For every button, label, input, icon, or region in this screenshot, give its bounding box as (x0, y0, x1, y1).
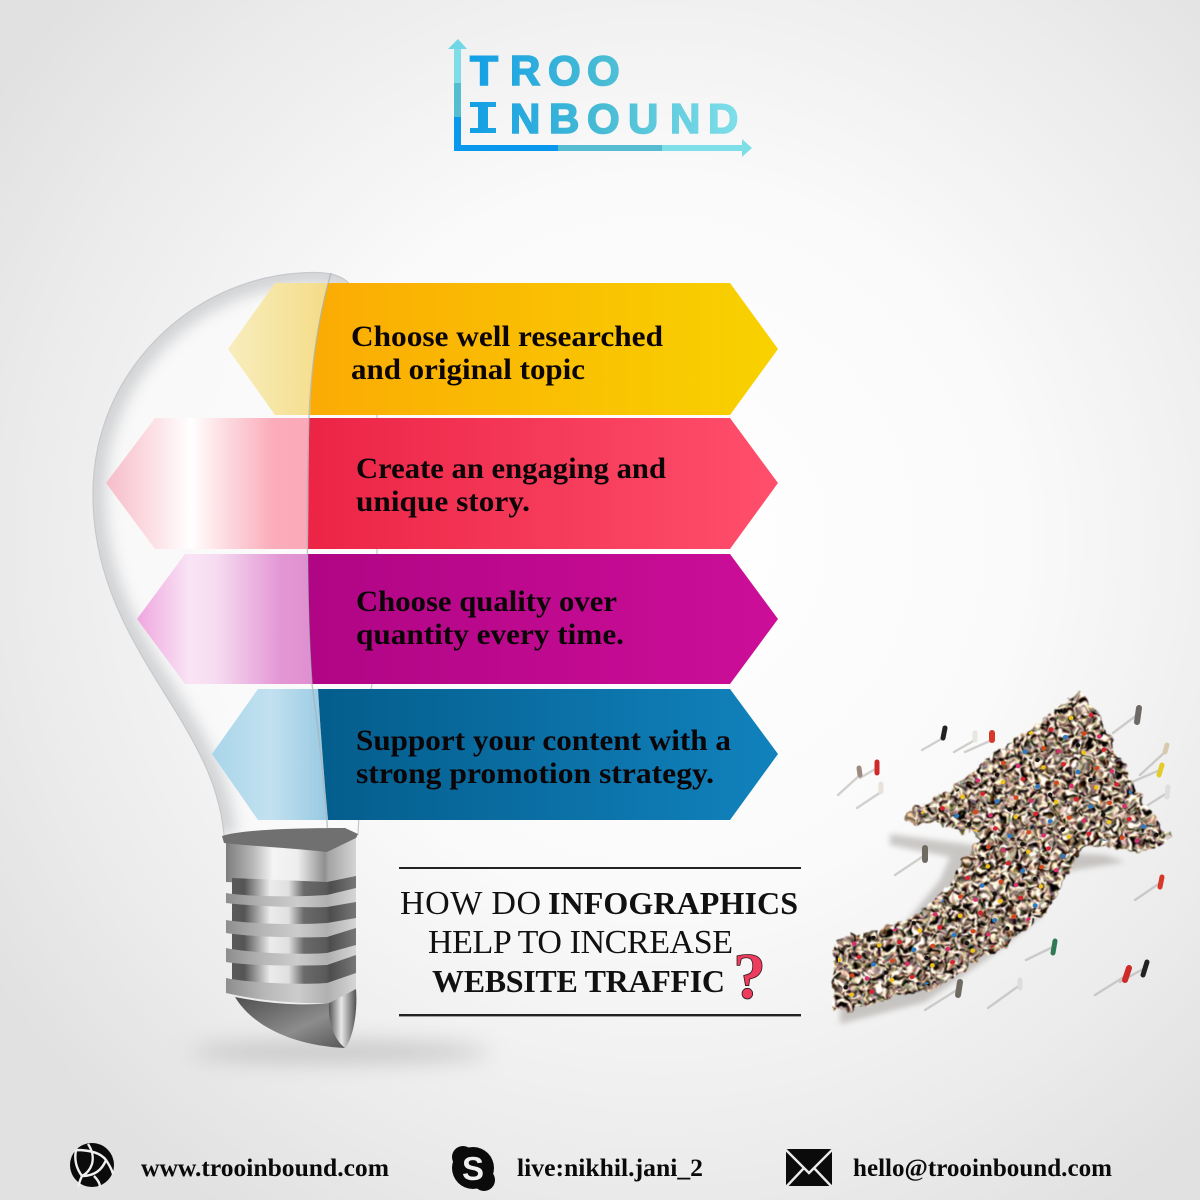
glass outline (93, 272, 377, 835)
glass envelope (93, 272, 377, 835)
logo wordmark INBOUND: NBOUND (510, 95, 738, 142)
footer contacts (70, 1143, 1112, 1191)
crowd body (833, 693, 1170, 1011)
top cap (222, 828, 358, 852)
step 1 text: Choose well researched (351, 320, 663, 353)
solid right half (310, 283, 778, 415)
heading line 1: HOW DO (400, 885, 541, 922)
icon: globe (70, 1143, 114, 1187)
icon: skype (452, 1146, 495, 1191)
step 4 text: strong promotion strategy. (356, 757, 714, 790)
skype handle: live:nikhil.jani_2 (517, 1155, 703, 1182)
email address: hello@trooinbound.com (853, 1155, 1112, 1182)
icon: bulb metal screw base (222, 828, 358, 1048)
pointed tip (235, 997, 345, 1048)
heading line 2: HELP TO INCREASE (428, 924, 733, 961)
logo wordmark TROO: ROO (510, 47, 620, 94)
logo vertical arrow (448, 39, 467, 151)
crowd shadow (840, 834, 1125, 1024)
step 3 text: quantity every time. (356, 618, 624, 651)
thread band 1 (226, 888, 356, 907)
panel: step 1 yellow arrow (228, 283, 778, 415)
icon: envelope (786, 1149, 832, 1187)
translucent left half (106, 418, 309, 549)
collar (226, 834, 356, 886)
bulb shadow on floor (190, 1042, 490, 1062)
solid right half (308, 554, 778, 684)
step 2 text: unique story. (356, 485, 530, 518)
heading line 3: WEBSITE TRAFFIC (432, 963, 725, 999)
step 2 text: Create an engaging and (356, 452, 666, 485)
translucent left half (137, 554, 312, 684)
logo: Troo Inbound (448, 39, 752, 157)
step 1 text: and original topic (351, 353, 585, 386)
step 3 text: Choose quality over (356, 585, 617, 618)
glass soft inner edge (93, 272, 352, 835)
bottom rule (399, 1014, 801, 1016)
pointed tip right facet (329, 989, 356, 1048)
website address: www.trooinbound.com (141, 1155, 389, 1182)
bulb glass edge over arrows (307, 273, 331, 835)
solid right half (318, 689, 778, 820)
thread band 2 (226, 918, 356, 937)
light bulb glass (93, 272, 490, 1062)
logo wordmark TROO: T (470, 47, 498, 94)
top rule (399, 867, 801, 869)
translucent left half (212, 689, 328, 820)
coloured clothing highlights (838, 698, 1163, 1005)
solid right half (308, 418, 778, 549)
heading (399, 867, 801, 1016)
dark threads (232, 876, 356, 990)
icon: skype: S (462, 1150, 484, 1187)
logo horizontal arrow (454, 139, 752, 157)
panel: step 2 red arrow (106, 418, 778, 549)
panel: step 3 magenta arrow (137, 554, 778, 684)
translucent left half (228, 283, 328, 415)
thread band 3 (226, 945, 356, 966)
step 4 text: Support your content with a (356, 724, 731, 757)
thread band 4 (226, 973, 356, 1003)
stray walkers (838, 708, 1168, 1010)
crowd forming an upward arrow (833, 693, 1170, 1024)
heading line 1: INFOGRAPHICS (548, 885, 798, 921)
icon: question mark: ? (733, 940, 766, 1013)
panel: step 4 blue arrow (212, 689, 778, 820)
